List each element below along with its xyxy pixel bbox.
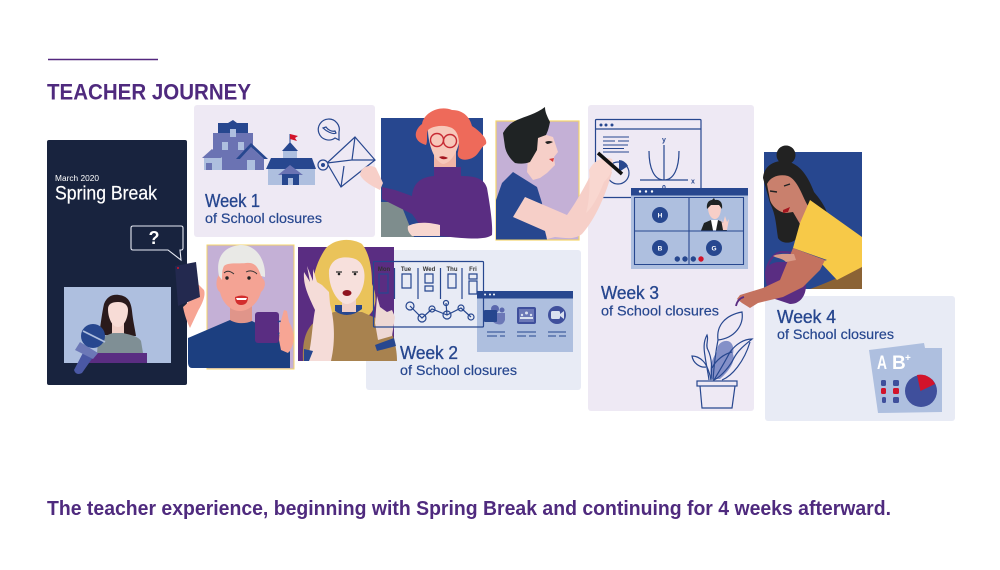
phone <box>175 262 200 306</box>
week 4 heading: Week 4 <box>777 307 836 327</box>
character: man with grey hair <box>183 245 294 369</box>
tagline: The teacher experience, beginning with Spring Break and continuing for 4 weeks afterward. <box>47 497 891 520</box>
whiteboard window with chart: 0 <box>662 185 666 192</box>
icon: teams <box>484 305 505 324</box>
video call window: B <box>658 246 663 252</box>
schedule window: Thu <box>446 267 458 273</box>
whiteboard window with chart <box>596 120 701 198</box>
schedule window <box>374 262 484 327</box>
schedule window: Tue <box>401 267 412 273</box>
icon: graded papers: B <box>892 353 906 374</box>
icon: graded papers: A <box>877 353 887 374</box>
icon: graded papers: + <box>905 353 911 364</box>
icon: phone bubble <box>318 119 339 140</box>
video call window <box>631 188 748 269</box>
schedule window: Mon <box>378 267 390 273</box>
week 2 heading: Week 2 <box>400 343 458 363</box>
panel: spring break <box>47 140 187 385</box>
character: teacher with red hair <box>381 108 492 238</box>
panel: week 3 <box>588 105 754 411</box>
icon: video meet <box>548 306 566 324</box>
title: TEACHER JOURNEY <box>47 80 251 104</box>
character: woman with bun <box>736 146 862 308</box>
video call window: G <box>711 246 717 252</box>
icon: houses <box>202 120 268 170</box>
character: woman with blonde hair <box>298 240 397 361</box>
panel: week 1 <box>194 105 375 237</box>
speech bubble with question mark <box>131 226 183 260</box>
handbag <box>765 252 806 304</box>
panel: week 4 <box>765 296 955 421</box>
video call window: H <box>658 212 663 220</box>
schedule window: Wed <box>423 267 436 273</box>
hand touching envelope <box>360 166 383 190</box>
character: teacher with black hair <box>496 107 612 240</box>
week 3 heading: Week 3 <box>601 283 659 303</box>
week 1 subheading: of School closures <box>205 210 322 226</box>
date label: March 2020 <box>55 174 100 183</box>
news screen with reporter <box>64 287 171 374</box>
icon: classroom <box>517 307 536 324</box>
hand with marker <box>586 153 622 213</box>
week 4 subheading: of School closures <box>777 326 894 342</box>
panel: week 2 <box>366 250 581 390</box>
week 3 subheading: of School closures <box>601 302 719 318</box>
week 1 heading: Week 1 <box>205 191 260 211</box>
person on video <box>701 198 729 230</box>
online apps window <box>477 291 573 352</box>
icon: graded papers <box>869 343 942 413</box>
whiteboard window with chart: x <box>691 178 695 186</box>
spring break heading: Spring Break <box>55 184 157 204</box>
whiteboard window with chart: y <box>662 137 666 144</box>
schedule window: Fri <box>469 267 477 273</box>
icon: envelope <box>318 137 375 187</box>
speech bubble with question mark: ? <box>148 228 160 248</box>
icon: plant <box>692 312 752 408</box>
week 2 subheading: of School closures <box>400 362 517 378</box>
icon: school <box>266 134 316 185</box>
